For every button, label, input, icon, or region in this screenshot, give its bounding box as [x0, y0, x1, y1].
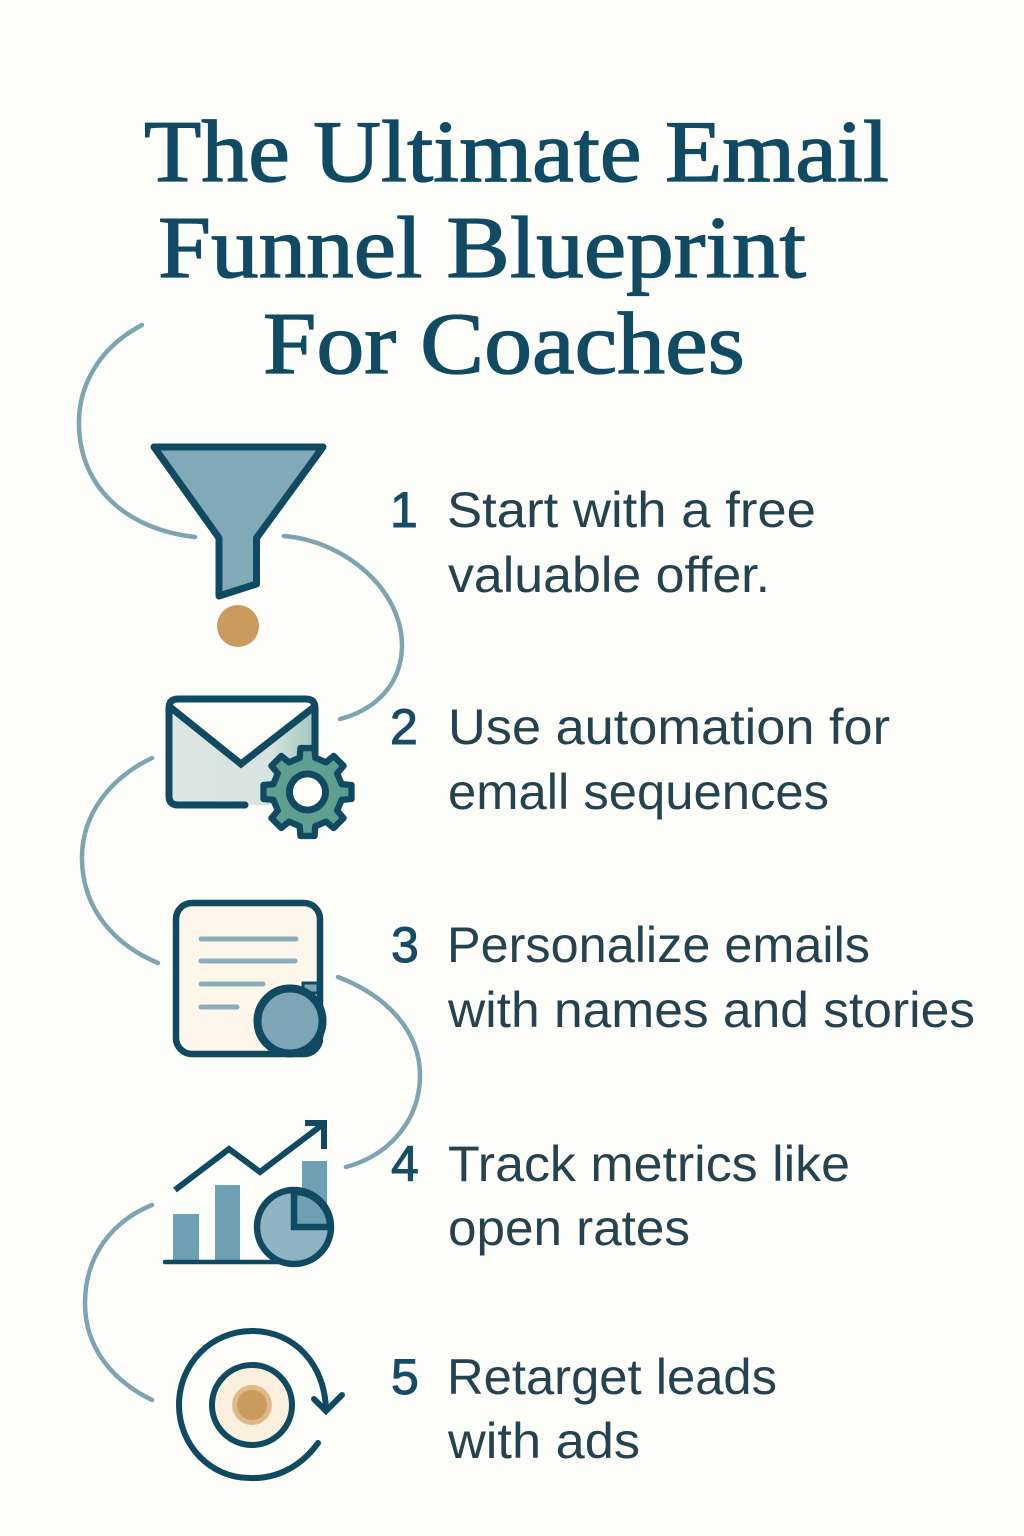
- icon: funnel with drop: [154, 447, 323, 647]
- step 4 text: open rates: [448, 1200, 690, 1256]
- connector: document to chart: [338, 977, 420, 1167]
- step 4 text: Track metrics like: [448, 1136, 850, 1192]
- step 4 text: [391, 1136, 850, 1256]
- title: [144, 104, 889, 393]
- step 4 text: 4: [391, 1136, 419, 1192]
- step 1 text: 1: [390, 482, 418, 538]
- step 3 text: Personalize emails: [447, 917, 870, 973]
- title: For Coaches: [263, 296, 745, 393]
- step 1 text: [390, 482, 816, 603]
- step 2 text: emall sequences: [448, 764, 829, 820]
- title: The Ultimate Email: [144, 104, 889, 201]
- step 2 text: [390, 699, 890, 820]
- step 2 text: Use automation for: [448, 699, 890, 755]
- icon: gear: [264, 748, 351, 836]
- connector: envelope to document: [82, 758, 158, 963]
- step 1 text: valuable offer.: [448, 547, 770, 603]
- step 3 text: [391, 917, 975, 1038]
- step 5 text: 5: [391, 1349, 419, 1405]
- step 3 text: with names and stories: [447, 982, 975, 1038]
- connector: funnel to envelope: [284, 536, 402, 719]
- icon: chart with pie and arrow: [165, 1123, 331, 1264]
- icon: envelope with gear: [169, 699, 351, 836]
- step 5 text: Retarget leads: [447, 1349, 777, 1405]
- step 5 text: [391, 1349, 777, 1469]
- title: Funnel Blueprint: [158, 200, 806, 297]
- connector: title to funnel: [79, 325, 195, 537]
- step 3 text: 3: [391, 917, 419, 973]
- icon: document with badge: [176, 903, 322, 1054]
- step 5 text: with ads: [447, 1413, 640, 1469]
- icon: retarget target with arrow: [179, 1331, 342, 1478]
- connector: chart to target: [85, 1205, 152, 1400]
- step 1 text: Start with a free: [447, 482, 816, 538]
- step 2 text: 2: [390, 699, 418, 755]
